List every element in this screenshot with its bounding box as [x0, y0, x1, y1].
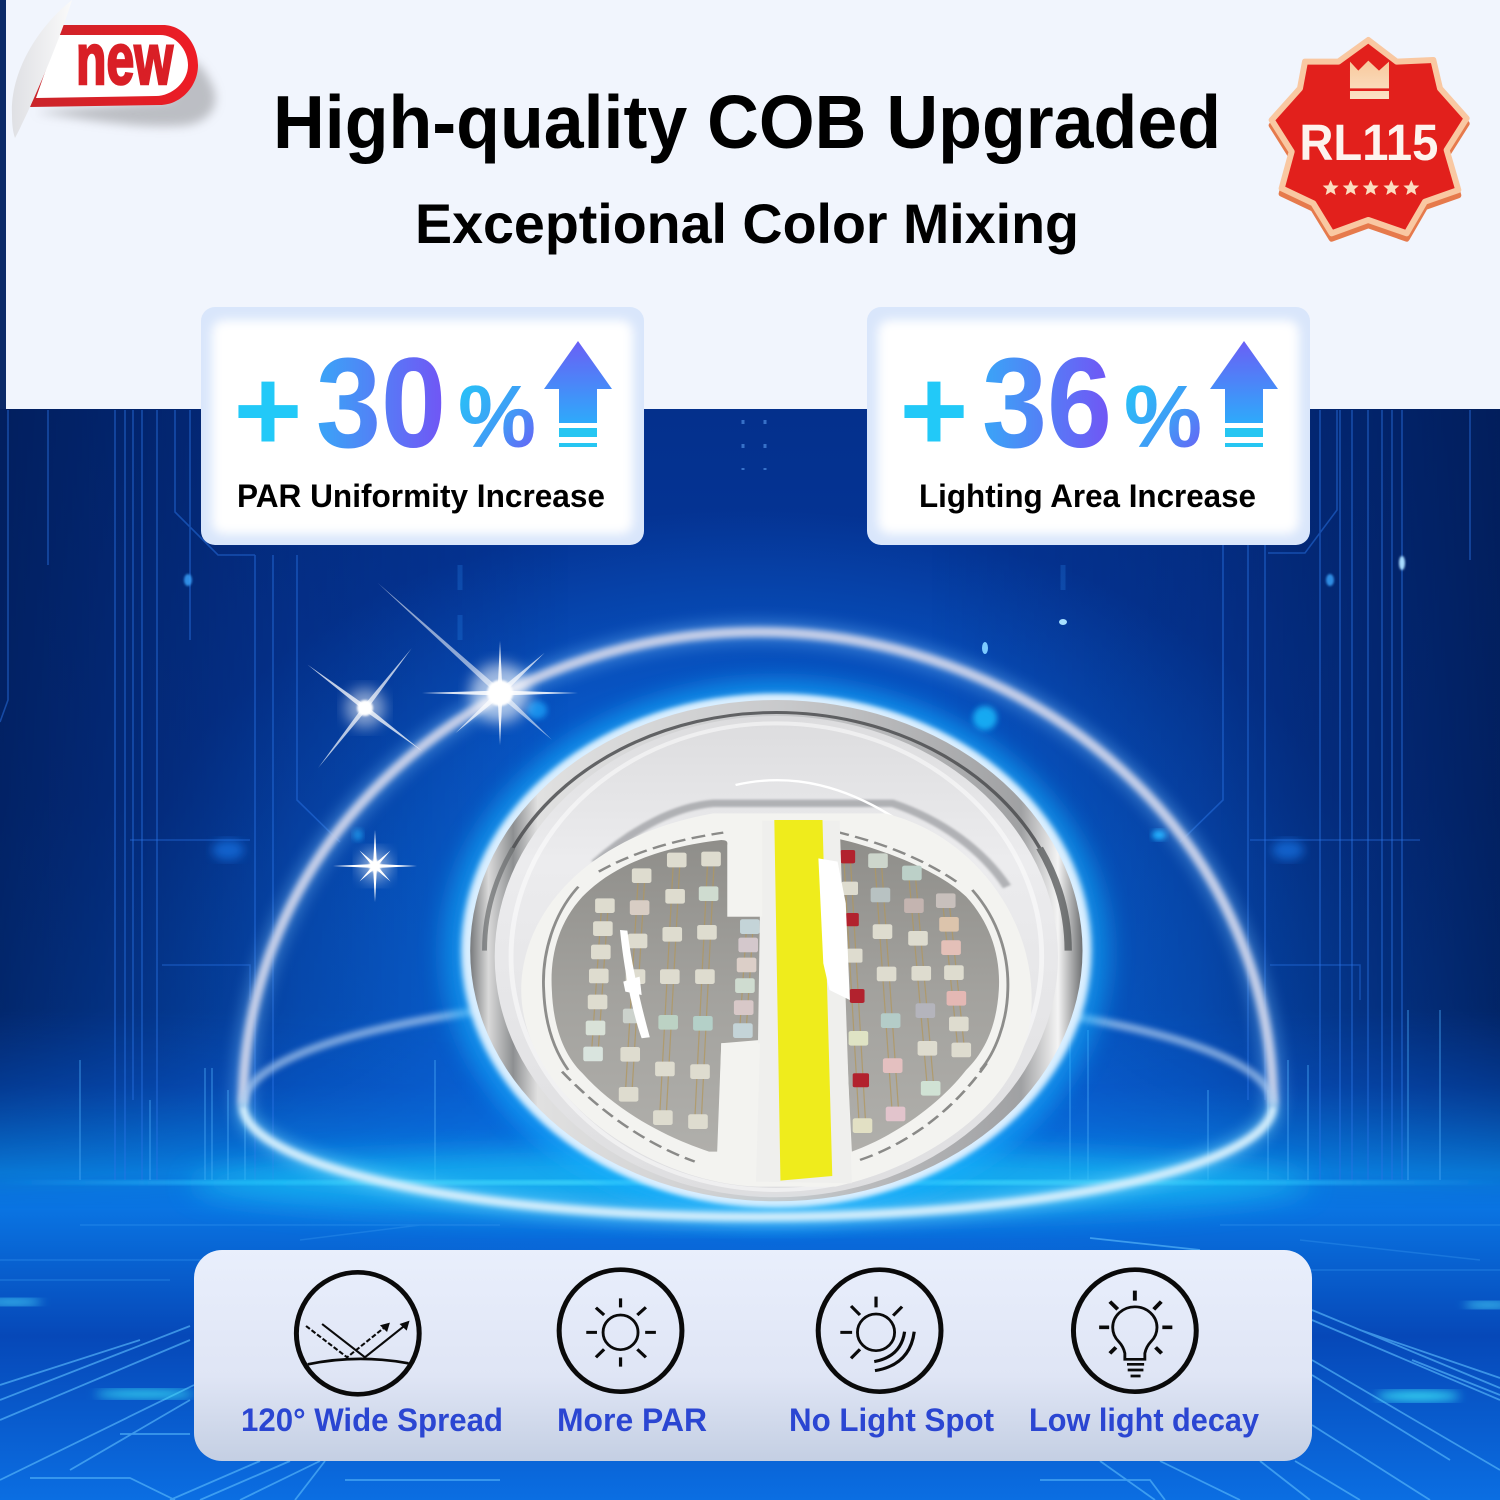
blue technology background [0, 409, 1500, 1500]
lens panels [552, 840, 762, 1152]
white lens bezel [521, 813, 1032, 1187]
stat: +30%: 30 [316, 332, 446, 475]
yellow COB strip [774, 820, 832, 1181]
horizon line [0, 1180, 1500, 1185]
icon: wide spread [296, 1272, 419, 1394]
LED wires [591, 856, 965, 1126]
RL115 badge [1272, 40, 1467, 239]
stat: +36%: % [1124, 367, 1202, 466]
chrome ring [470, 700, 1083, 1201]
stat: +36%: 36 [982, 332, 1112, 475]
stat: +30%: % [458, 367, 536, 466]
light dome back arc [243, 632, 1273, 1105]
icon: no light spot [818, 1270, 941, 1392]
icon: low light decay [1073, 1270, 1196, 1392]
new sticker [12, 0, 215, 138]
crown icon [1350, 61, 1389, 99]
LED chips [583, 850, 971, 1133]
stat: +30%: + [234, 345, 302, 477]
subtitle: Exceptional Color Mixing [415, 192, 1079, 255]
stat: +36%: + [900, 345, 968, 477]
icon: more PAR [559, 1270, 682, 1392]
label: no light spot: No Light Spot [789, 1402, 994, 1438]
card label: PAR Uniformity Increase [237, 478, 605, 514]
panel: lighting area card [867, 307, 1310, 545]
label: more PAR: More PAR [557, 1402, 707, 1438]
panel: PAR uniformity card [201, 307, 644, 545]
new label: new [76, 20, 174, 100]
sparkle stars [306, 580, 578, 902]
white body centre column [756, 821, 852, 1183]
sticker pill [30, 25, 198, 107]
icon: up arrow [544, 341, 612, 447]
card label: Lighting Area Increase [919, 478, 1256, 514]
light dome base arc front [243, 1105, 1273, 1217]
five stars [1323, 180, 1419, 195]
stat: +30% [234, 332, 536, 477]
left navy edge strip [0, 0, 6, 409]
lens highlights [818, 858, 850, 1000]
label: 120 wide spread: 120° Wide Spread [241, 1402, 503, 1438]
panel: feature strip [194, 1250, 1312, 1461]
icon: up arrow [1210, 341, 1278, 447]
lamp product photo [444, 680, 1109, 1223]
model name: RL115 [1299, 114, 1438, 171]
peel flap [12, 0, 72, 138]
label: low light decay: Low light decay [1029, 1402, 1259, 1438]
title: High-quality COB Upgraded [273, 80, 1221, 164]
stat: +36% [900, 332, 1202, 477]
hood shadow band [595, 803, 1007, 887]
top light background [0, 0, 1500, 410]
